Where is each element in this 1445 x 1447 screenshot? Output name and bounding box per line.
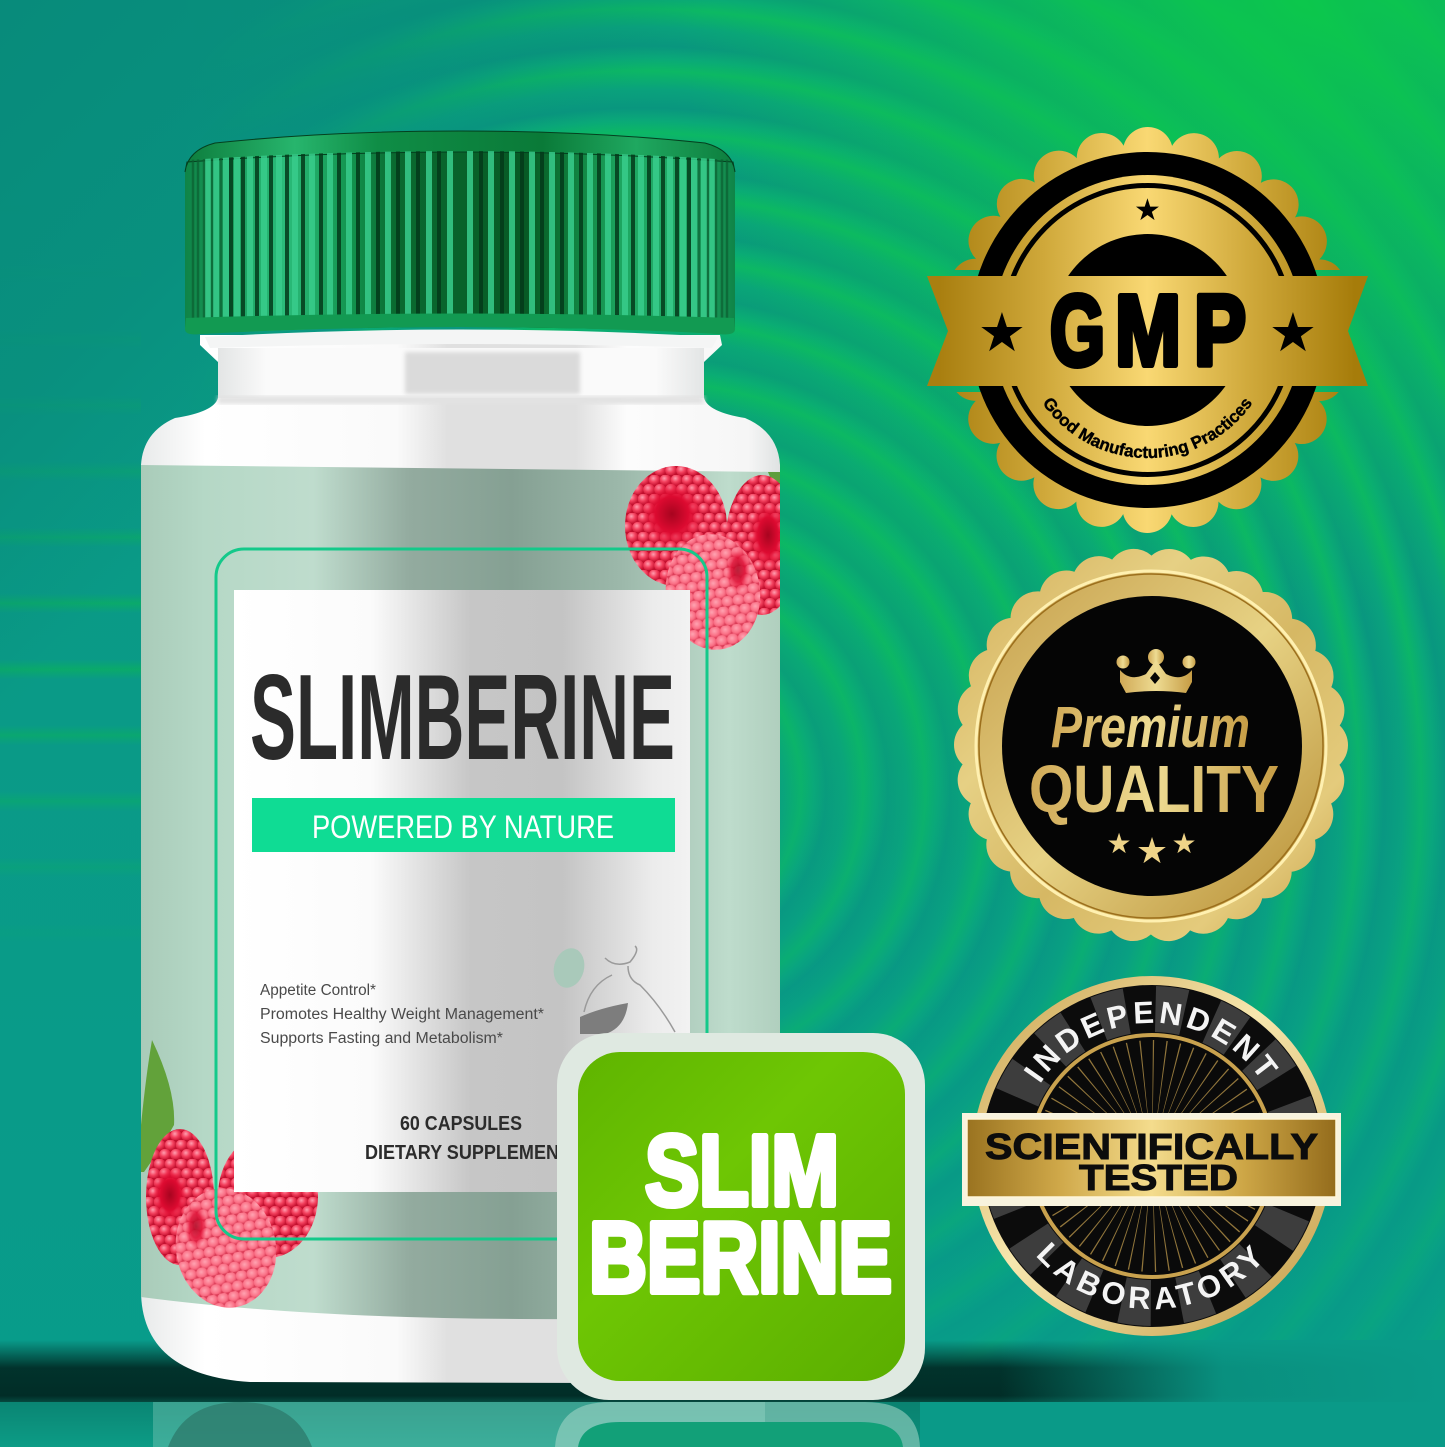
raspberries top right — [625, 466, 780, 650]
raspberries bottom left and leaf — [141, 1040, 318, 1316]
box text SLIM BERINE — [589, 1115, 892, 1314]
three stars — [1106, 828, 1197, 871]
banner text: TESTED — [1079, 1157, 1238, 1198]
premium rings and black disc — [976, 571, 1326, 921]
GMP letters — [1050, 275, 1246, 387]
box green face — [578, 1052, 905, 1381]
badge: Scientifically Tested — [962, 976, 1341, 1336]
small product box — [557, 1033, 925, 1400]
GMP top star: ★ — [1134, 194, 1161, 227]
benefits list: Promotes Healthy Weight Management* — [260, 1006, 544, 1023]
sunburst — [1074, 1078, 1230, 1234]
GMP letters: M — [1115, 275, 1181, 387]
GMP black ring and inner circle — [970, 152, 1326, 508]
capacity and type text — [365, 1113, 570, 1164]
benefits list: Appetite Control* — [260, 982, 376, 999]
green tagline bar: POWERED BY NATURE — [312, 809, 614, 845]
product bottle — [141, 131, 799, 1383]
capacity and type text: DIETARY SUPPLEMENT — [365, 1142, 570, 1164]
GMP ribbon stars: ★ — [978, 303, 1026, 363]
label green outline frame — [216, 549, 707, 1239]
lab arc text: LABORATORY — [1036, 1242, 1260, 1310]
lab ribbon banner — [962, 1113, 1341, 1206]
floor shadow and reflection — [0, 1340, 1445, 1447]
GMP scalloped gold edge — [970, 152, 1326, 508]
GMP ribbon stars: ★ — [1269, 303, 1317, 363]
box casing — [557, 1033, 925, 1400]
lab badge outer rings — [972, 976, 1332, 1336]
GMP letters: G — [1050, 275, 1105, 387]
banner text — [985, 1126, 1318, 1198]
GMP arc caption: Good Manufacturing Practices — [1044, 398, 1252, 458]
brand name SLIMBERINE: SLIMBERINE — [250, 649, 675, 785]
bottle label wrap — [141, 465, 780, 1320]
capacity and type text: 60 CAPSULES — [400, 1113, 522, 1135]
crown icon — [1116, 649, 1196, 693]
badge: Premium Quality — [976, 571, 1326, 921]
premium scalloped gold edge — [981, 575, 1321, 915]
box text SLIM BERINE: BERINE — [589, 1202, 892, 1314]
three stars: ★ — [1106, 828, 1132, 859]
badge: GMP — [927, 127, 1368, 533]
banner text: SCIENTIFICALLY — [985, 1126, 1318, 1167]
benefits list: Supports Fasting and Metabolism* — [260, 1030, 503, 1047]
lab arc text — [1024, 1002, 1279, 1310]
GMP letters: P — [1194, 275, 1246, 387]
three stars: ★ — [1136, 830, 1168, 871]
three stars: ★ — [1171, 828, 1197, 859]
premium script text: Premium — [1051, 695, 1250, 760]
green tagline bar — [252, 798, 675, 852]
box text SLIM BERINE: SLIM — [645, 1115, 839, 1227]
bottle body — [141, 335, 780, 1383]
bottle neck highlights — [205, 330, 718, 404]
quality text: QUALITY — [1029, 752, 1279, 827]
GMP gold ribbon — [927, 276, 1368, 386]
woman figure icon — [549, 945, 675, 1034]
lab arc text: INDEPENDENT — [1024, 1002, 1279, 1082]
bottle cap — [185, 131, 735, 334]
white label panel — [234, 590, 690, 1192]
benefits list — [260, 982, 544, 1047]
GMP ribbon stars — [978, 303, 1317, 363]
